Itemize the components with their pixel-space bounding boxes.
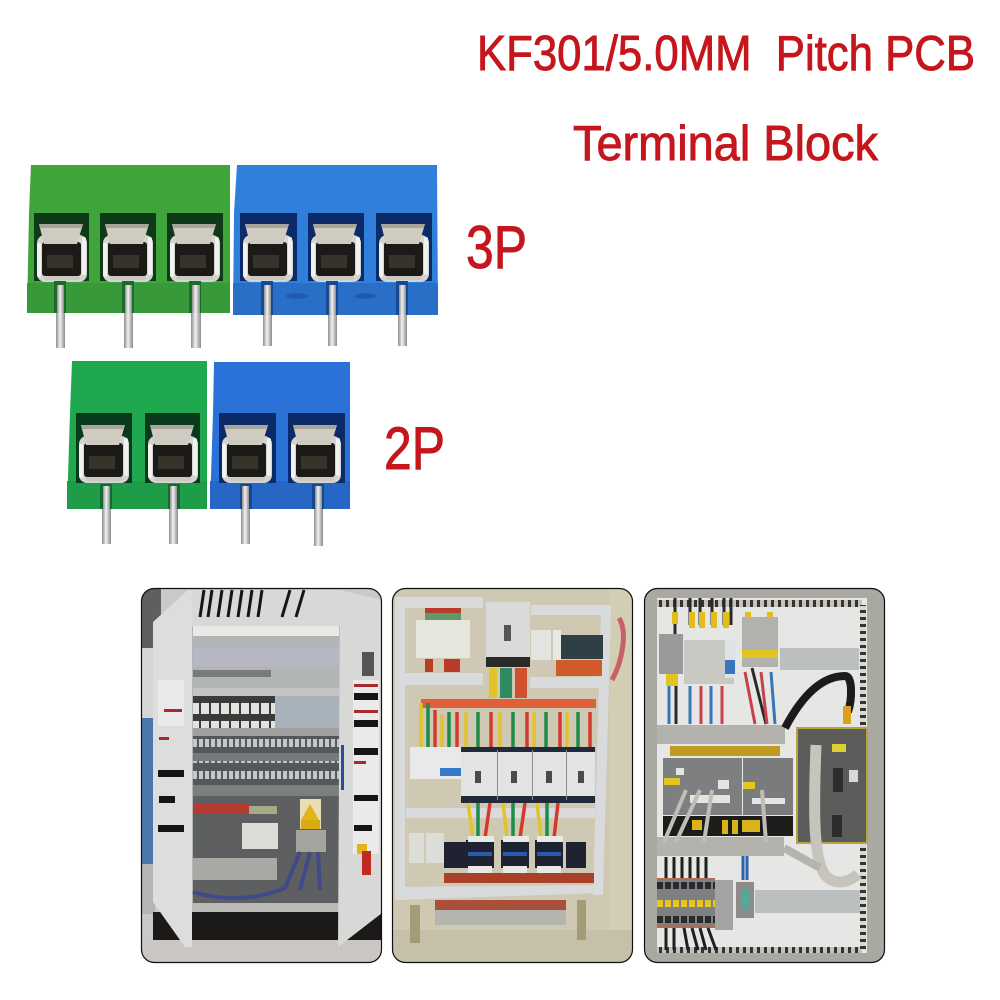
bundled wires	[193, 852, 320, 898]
red and amber switches	[193, 803, 249, 814]
3P blue block	[233, 165, 438, 315]
cabinet base	[153, 912, 382, 940]
PLC modules	[663, 746, 793, 836]
photo 1: open control cabinet	[141, 588, 382, 963]
danger sign	[300, 799, 321, 829]
bottom terminal block	[657, 878, 754, 930]
cabinet interior	[192, 590, 342, 912]
2P blue block	[210, 362, 350, 509]
photo 2: distribution panel	[392, 588, 633, 963]
black cable loop	[785, 676, 851, 728]
2P terminal blocks	[67, 361, 350, 546]
frame	[395, 597, 611, 900]
grey cable bundle	[815, 745, 858, 882]
3P terminal blocks	[27, 165, 438, 348]
top wires	[669, 598, 775, 724]
coloured wires	[421, 703, 590, 747]
2P label: 2P	[384, 415, 445, 482]
side terminal strips	[410, 900, 586, 943]
top terminals	[659, 617, 778, 686]
3P green block	[27, 165, 230, 313]
DIN rails	[755, 648, 860, 913]
orange busbar	[421, 699, 596, 708]
3P label: 3P	[466, 214, 527, 281]
overhead black cables	[200, 590, 304, 617]
top right relays	[531, 630, 603, 676]
small breakers	[409, 833, 444, 863]
cabinet floor rail	[192, 903, 342, 912]
relays	[242, 823, 278, 849]
network switch	[797, 728, 867, 843]
title	[477, 27, 975, 171]
2P pins	[102, 480, 323, 546]
door wires	[612, 618, 623, 680]
breaker row	[410, 747, 595, 803]
photo 3: network control panel	[644, 588, 885, 963]
left door	[153, 590, 192, 947]
title: Terminal Block	[573, 117, 878, 171]
3P pins	[56, 280, 407, 348]
right door	[338, 590, 382, 947]
main breaker	[486, 602, 530, 698]
PLC module	[416, 608, 470, 672]
enclosure frame	[644, 588, 885, 963]
bottom wires	[666, 856, 747, 950]
PLC grey cables	[664, 790, 766, 842]
lower terminal rail	[435, 900, 566, 925]
2P green block	[67, 361, 207, 509]
contactors	[444, 836, 594, 883]
wire ducts	[657, 600, 866, 953]
lower wires	[468, 803, 558, 838]
